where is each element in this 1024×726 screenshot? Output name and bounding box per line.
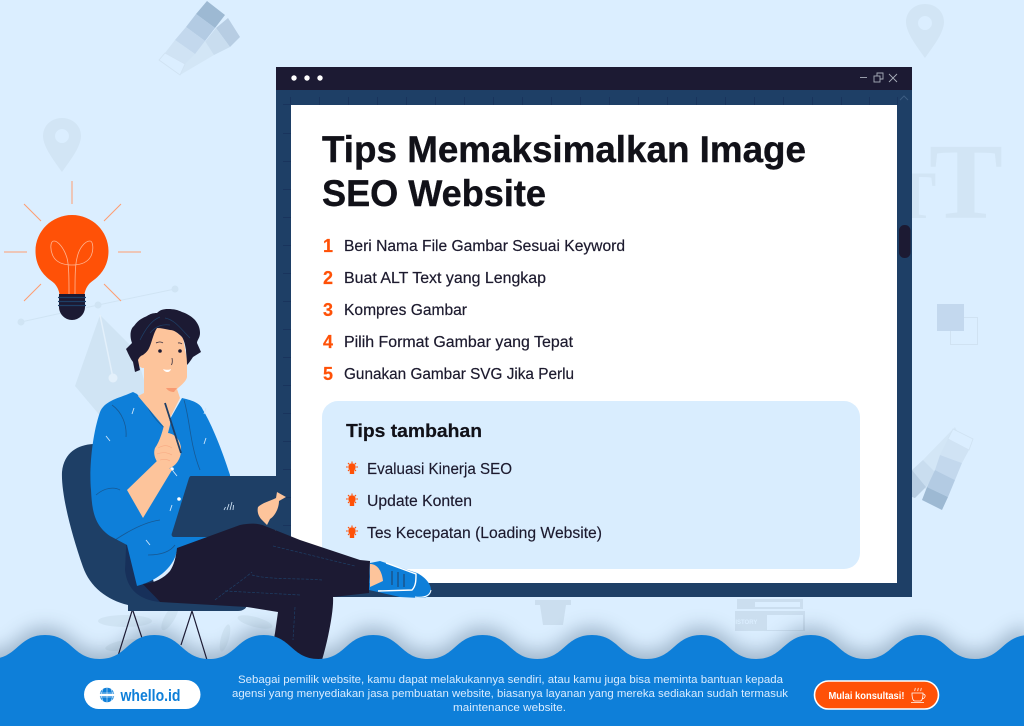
scrollbar [899, 225, 910, 258]
extra tip 1: Evaluasi Kinerja SEO [367, 461, 512, 478]
icon: globe [99, 688, 115, 702]
bulb base [59, 294, 85, 320]
icon: colour swatches top left [159, 1, 240, 75]
icon: books [731, 599, 805, 631]
tip 1: 1 [323, 236, 333, 256]
extra tip 2: Update Konten [367, 493, 472, 510]
chair [62, 444, 247, 611]
window dots [291, 75, 323, 81]
icon: font letters TT: T [891, 157, 936, 233]
tip 2: Buat ALT Text yang Lengkap [344, 270, 546, 287]
window frame [276, 67, 912, 597]
tablet [172, 476, 277, 537]
eyes, nose and mouth [158, 349, 182, 353]
tip 5: Gunakan Gambar SVG Jika Perlu [344, 366, 574, 383]
tip 4: 4 [323, 332, 333, 352]
shoe [369, 561, 431, 598]
hair strands [140, 317, 190, 340]
scroll arrow [900, 96, 908, 100]
raised hand [154, 419, 181, 468]
logo text: whello.id [120, 686, 180, 705]
numbered tips list [323, 236, 625, 384]
panel heading: Tips tambahan [346, 420, 482, 441]
pen [165, 403, 181, 453]
neck shadow [166, 388, 177, 392]
title: SEO Website [322, 173, 546, 214]
footer paragraph: agensi yang menyediakan jasa pembuatan website, biasanya layanan yang mereka sediakan sudah termasuk [232, 688, 789, 700]
neck and face [138, 328, 187, 428]
bulb glass [36, 215, 108, 294]
content page [291, 105, 897, 583]
extra tip 3: Tes Kecepatan (Loading Website) [367, 525, 602, 542]
bulb rays [4, 181, 141, 301]
icon: pen tool [18, 286, 178, 418]
icon: overlapping squares [937, 304, 978, 344]
ruler ticks [283, 97, 898, 554]
icon: light bulb [4, 181, 141, 320]
footer paragraph: Sebagai pemilik website, kamu dapat melakukannya sendiri, atau kamu juga bisa meminta bantuan kepada [238, 674, 784, 686]
icon: coffee cup [911, 688, 925, 702]
trouser seams [215, 546, 355, 640]
call to action button [814, 681, 938, 709]
illustration: person sitting [62, 309, 431, 660]
tip 2: 2 [323, 268, 333, 288]
window controls [860, 73, 897, 82]
raised arm [127, 460, 172, 518]
tip 4: Pilih Format Gambar yang Tepat [344, 334, 574, 351]
tip 3: 3 [323, 300, 333, 320]
footer paragraph: maintenance website. [453, 702, 566, 714]
icon: location pin left [43, 118, 81, 172]
shirt [90, 392, 230, 586]
panel: tips tambahan [322, 401, 860, 569]
footer wave band [0, 635, 1024, 726]
tip 5: 5 [323, 364, 333, 384]
tablet logo [224, 502, 234, 510]
icon: font letters TT: T [929, 123, 1003, 242]
icon: faint leaves [98, 602, 274, 653]
shirt folds [96, 395, 200, 555]
ear [138, 354, 148, 368]
icon: books: HISTORY [731, 620, 757, 626]
hair [126, 309, 201, 372]
wave shadow [0, 627, 1024, 726]
logo pill [84, 680, 200, 709]
hand on tablet [258, 492, 286, 525]
title: Tips Memaksimalkan Image [322, 129, 806, 170]
tip 1: Beri Nama File Gambar Sesuai Keyword [344, 238, 625, 255]
footer paragraph [232, 674, 789, 714]
title bar [276, 67, 912, 90]
icon: font letters TT [891, 123, 1003, 242]
button label: Mulai konsultasi! [828, 691, 904, 702]
icon: plant pot [535, 600, 571, 625]
title [322, 129, 806, 214]
icon: colour swatches right [912, 427, 973, 510]
tip 3: Kompres Gambar [344, 302, 467, 319]
trousers [143, 524, 370, 660]
icon: location pin right [906, 4, 944, 58]
bulb filament [51, 241, 93, 294]
browser window [276, 67, 912, 597]
chair legs [118, 611, 207, 660]
